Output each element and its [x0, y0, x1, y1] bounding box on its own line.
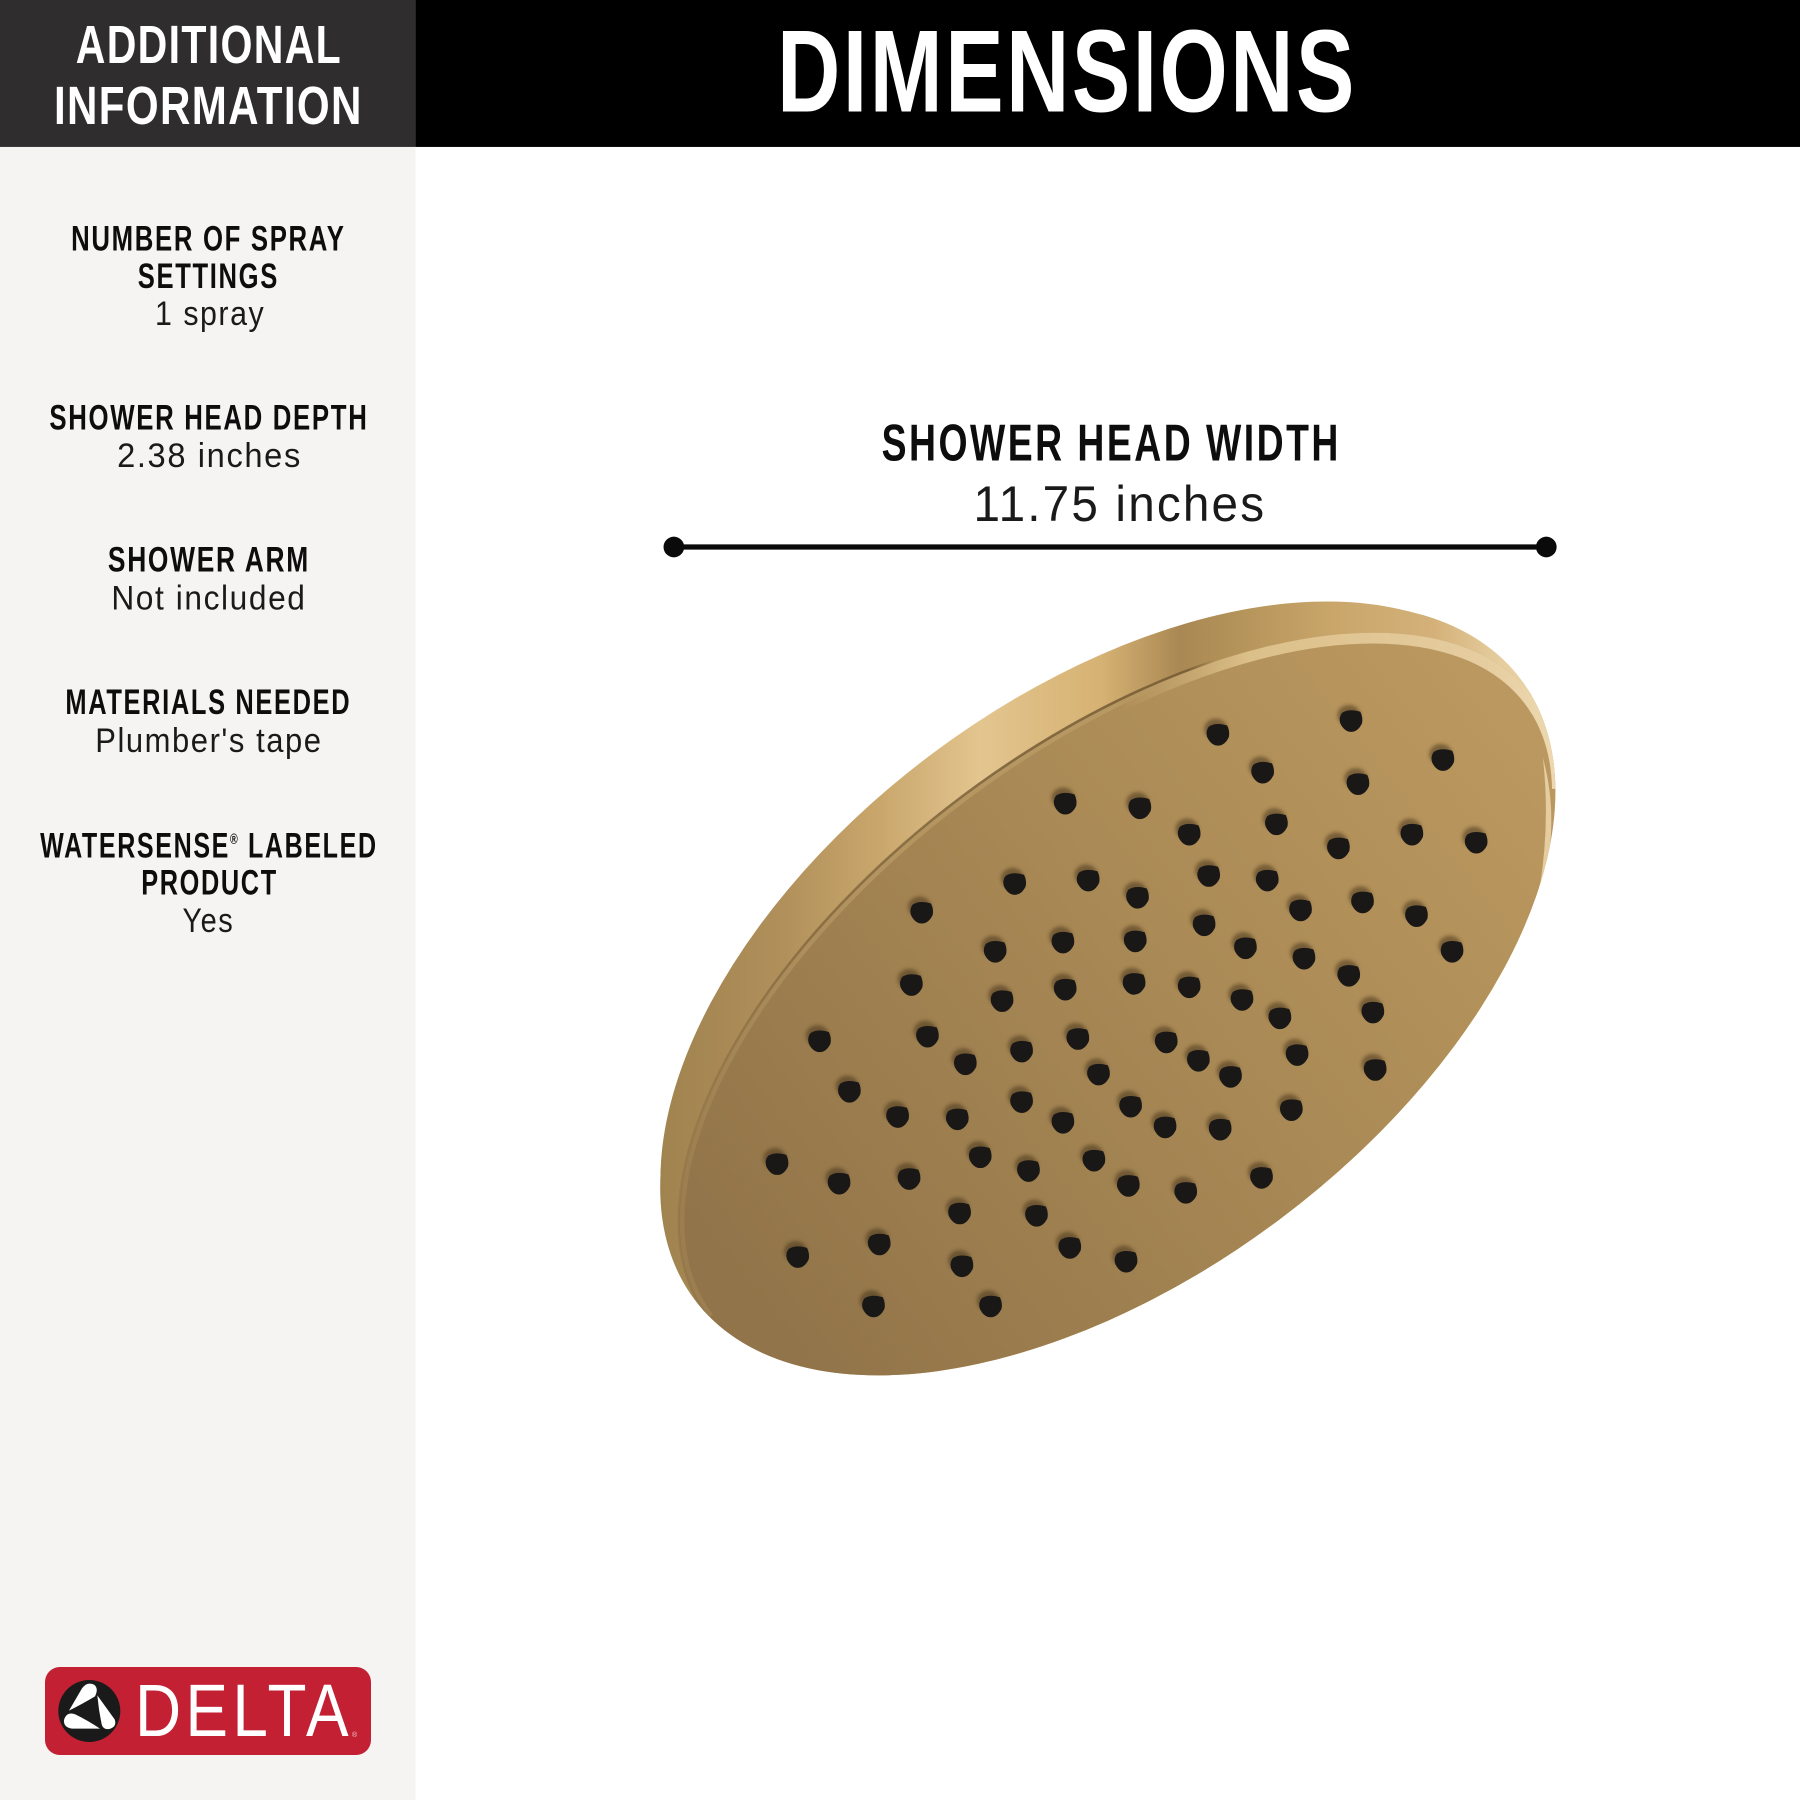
logo: Delta — [45, 1667, 371, 1755]
spec: watersense labeled product — [40, 826, 378, 940]
spec: shower head depth: 2.38 inches — [117, 437, 302, 475]
label: shower head width: SHOWER HEAD WIDTH — [882, 413, 1341, 471]
label: shower head width: 11.75 inches — [973, 475, 1266, 532]
spec: number of spray settings: SETTINGS — [138, 256, 279, 296]
panel: additional information sidebar — [0, 147, 416, 1800]
spec: shower head depth — [49, 397, 368, 475]
spec: shower arm: Not included — [111, 580, 307, 618]
spec: number of spray settings — [71, 218, 346, 333]
spec: number of spray settings: NUMBER OF SPRAY — [71, 218, 346, 258]
header: additional information: ADDITIONAL — [76, 15, 342, 75]
dimension line — [664, 537, 1557, 557]
spec: materials needed: MATERIALS NEEDED — [65, 682, 351, 722]
spec: number of spray settings: 1 spray — [155, 295, 265, 333]
logo: Delta: ® — [352, 1731, 358, 1739]
header: additional information: INFORMATION — [54, 76, 363, 136]
spec: watersense labeled product: ® — [230, 831, 239, 848]
spec: watersense labeled product: LABELED — [239, 826, 378, 866]
header: dimensions title: DIMENSIONS — [777, 5, 1357, 136]
spec: shower arm — [108, 540, 310, 618]
spec: watersense labeled product: WATERSENSE — [40, 826, 310, 866]
spec: shower head depth: SHOWER HEAD DEPTH — [49, 397, 368, 437]
spec: shower arm: SHOWER ARM — [108, 540, 310, 580]
spec: watersense labeled product: Yes — [183, 902, 234, 940]
spray nozzles — [763, 705, 1488, 1317]
spec: watersense labeled product: PRODUCT — [141, 862, 278, 902]
header: additional information — [0, 0, 416, 147]
shower head — [660, 602, 1564, 1383]
spec: materials needed: Plumber's tape — [95, 722, 323, 760]
label: shower head width — [882, 413, 1341, 532]
spec: materials needed — [65, 682, 351, 760]
icon: Delta emblem — [58, 1680, 120, 1742]
logo: Delta: DELTA — [135, 1669, 353, 1752]
header: dimensions title — [416, 0, 1800, 147]
